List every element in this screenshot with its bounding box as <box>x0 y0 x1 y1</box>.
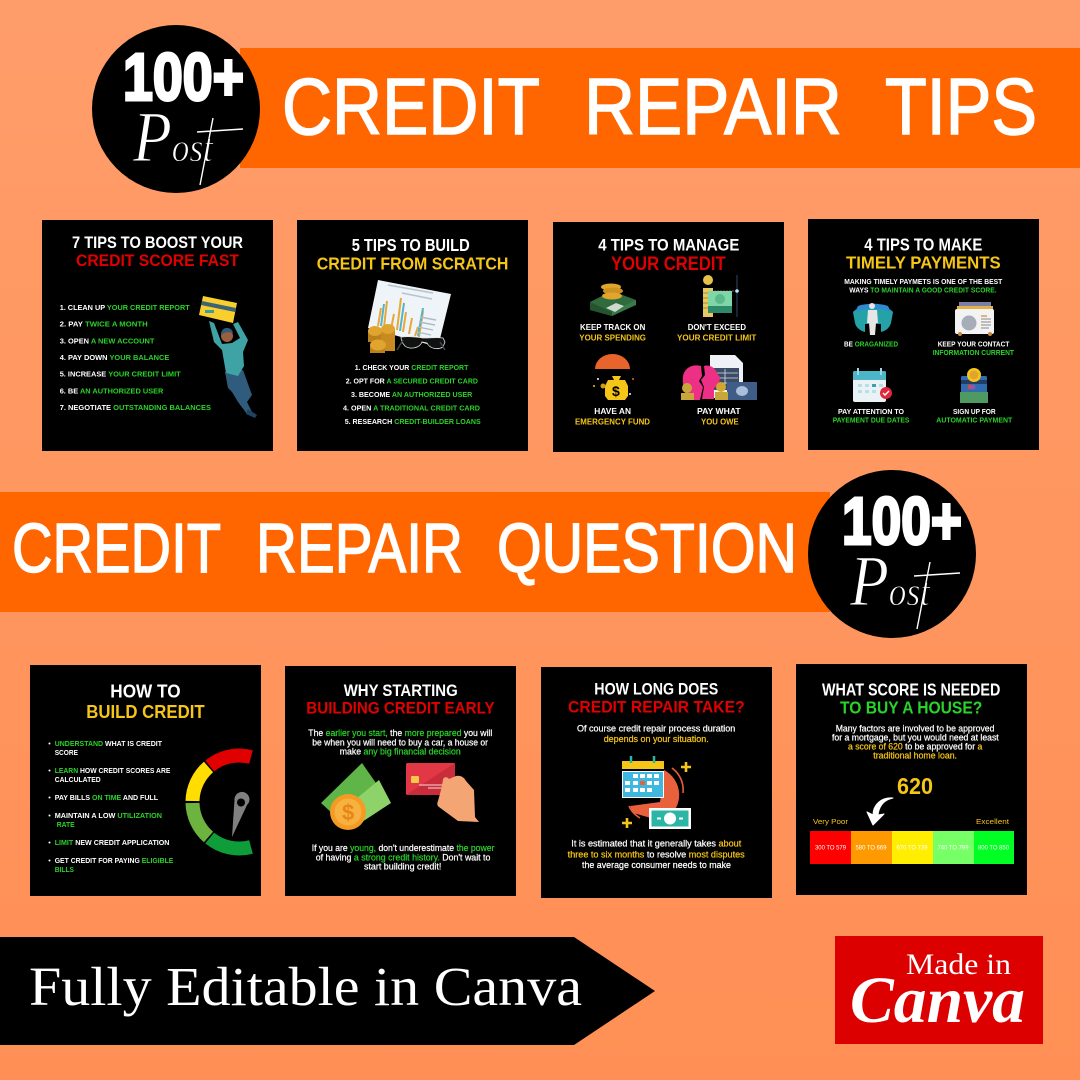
heading: credit repair question: QUESTION <box>497 509 797 587</box>
scale labels: Excellent <box>976 817 1010 826</box>
tips list: 1. CLEAN UP YOUR CREDIT REPORT <box>60 303 190 312</box>
icon: money and coin: $ <box>342 800 354 825</box>
chart: credit score bar: 670 TO 739 <box>896 845 928 852</box>
chart: credit score bar: 580 TO 669 <box>856 845 887 852</box>
tips list: 5. INCREASE YOUR CREDIT LIMIT <box>60 370 181 379</box>
text: keep your contact information current: INFORMATION CURRENT <box>933 350 1015 357</box>
tips list: 4. OPEN A TRADITIONAL CREDIT CARD <box>343 403 481 412</box>
paragraph: earlier you start <box>308 728 492 757</box>
tips list: 5. RESEARCH CREDIT-BUILDER LOANS <box>345 417 481 426</box>
bullet list: UNDERSTAND WHAT IS CREDIT <box>55 739 162 748</box>
text: have an emergency fund <box>575 406 650 426</box>
text: don't exceed your credit limit: DON'T EXCEED <box>688 322 746 332</box>
arrow banner: fully editable in canva: Fully Editable in Canva <box>29 956 582 1017</box>
bullet list: GET CREDIT FOR PAYING ELIGIBLE <box>55 856 173 865</box>
heading: credit repair tips <box>282 62 1037 151</box>
panel heading: CREDIT SCORE FAST <box>76 252 239 270</box>
text: pay attention to payment due dates <box>833 409 910 425</box>
text: keep your contact information current <box>933 342 1015 357</box>
badge: made in canva: Canva <box>850 964 1025 1037</box>
icon: report with coins and glasses <box>368 280 451 353</box>
bullet list: MAINTAIN A LOW UTILIZATION <box>55 811 162 820</box>
icon: umbrella over money bag <box>593 354 634 400</box>
icon: umbrella over money bag: $ <box>612 383 620 399</box>
text: keep track on your spending: KEEP TRACK ON <box>580 322 645 332</box>
paragraph: three to six months: It is estimated that it generally takes about <box>571 839 742 849</box>
text: pay attention to payment due dates: PAYEMENT DUE DATES <box>833 418 910 425</box>
arrow: points to score bar <box>867 798 893 825</box>
scale labels <box>813 817 1010 826</box>
panel heading: WHAT SCORE IS NEEDED <box>822 680 1000 700</box>
icon: organized person <box>853 303 893 335</box>
panel heading: WHY STARTING <box>344 681 458 700</box>
text: sign up for automatic payment <box>936 409 1013 425</box>
panel heading <box>72 234 243 270</box>
text: pay what you owe: PAY WHAT <box>697 406 742 416</box>
paragraph: earlier you start: be when you will need to buy a car, a house or <box>312 737 488 747</box>
badge: 100+ post middle: 100+ <box>842 484 962 559</box>
text: keep track on your spending: YOUR SPENDING <box>579 333 646 343</box>
tips list: 4. PAY DOWN YOUR BALANCE <box>60 353 169 362</box>
tips list: 3. OPEN A NEW ACCOUNT <box>60 336 155 345</box>
badge: 100+ post top: 100+ <box>123 40 244 115</box>
intro text <box>844 279 1003 294</box>
panel heading <box>598 236 739 275</box>
panel: 4 tips to manage your credit <box>553 222 784 452</box>
tips list: 2. OPT FOR A SECURED CREDIT CARD <box>346 376 479 385</box>
chart: credit score bar: 800 TO 850 <box>978 845 1010 852</box>
panel heading: BUILD CREDIT <box>86 701 205 722</box>
panel: 5 tips to build credit from scratch <box>297 220 528 451</box>
banner: credit repair tips <box>240 48 1080 168</box>
tips list: 7. NEGOTIATE OUTSTANDING BALANCES <box>60 403 211 412</box>
panel: 7 tips to boost your credit score fast <box>42 220 273 451</box>
tips list: 3. BECOME AN AUTHORIZED USER <box>351 390 473 399</box>
panel heading: HOW TO <box>110 680 181 701</box>
icon: hand holding credit card <box>406 763 479 822</box>
paragraph: mortgage score <box>832 723 999 761</box>
badge: 100+ post top <box>92 25 260 193</box>
panel heading <box>306 681 495 718</box>
icon: contact information <box>955 302 994 336</box>
panel heading: HOW LONG DOES <box>594 679 718 698</box>
panel: how to build credit <box>30 665 261 896</box>
badge: made in canva <box>835 936 1043 1044</box>
paragraph: if you are young <box>312 843 494 872</box>
bullet list: CALCULATED <box>55 775 101 784</box>
heading: credit repair tips: TIPS <box>885 62 1037 151</box>
intro text: WAYS TO MAINTAIN A GOOD CREDIT SCORE. <box>849 287 997 294</box>
panel heading: CREDIT REPAIR TAKE? <box>568 698 745 717</box>
panel: how long does credit repair take <box>541 667 772 898</box>
chart: credit score bar: 740 TO 799 <box>938 845 969 852</box>
tips list: 6. BE AN AUTHORIZED USER <box>60 386 164 395</box>
badge: 100+ post top: Post <box>132 97 214 177</box>
badge: 100+ post middle <box>808 470 976 638</box>
heading: credit repair tips: CREDIT <box>282 62 540 151</box>
banner: credit repair question <box>0 492 830 612</box>
panel: why starting building credit early <box>285 666 516 896</box>
paragraph: if you are young: start building credit! <box>364 862 441 872</box>
badge: made in canva: Made in <box>906 948 1011 981</box>
text: don't exceed your credit limit <box>677 322 757 343</box>
panel heading: 4 TIPS TO MANAGE <box>598 236 739 255</box>
icon: money and coin <box>321 763 391 830</box>
arrow banner: fully editable in canva <box>0 937 655 1045</box>
paragraph: if you are young: of having a strong credit history. Don't wait to <box>316 852 490 862</box>
text: keep track on your spending <box>579 322 646 343</box>
panel heading: BUILDING CREDIT EARLY <box>306 699 495 718</box>
score value 620: 620 <box>897 773 933 799</box>
bullet list: LIMIT NEW CREDIT APPLICATION <box>55 838 169 847</box>
text: pay what you owe: YOU OWE <box>701 416 739 426</box>
icon: automatic payment <box>960 368 988 403</box>
icon: person holding credit card <box>199 296 257 418</box>
paragraph: process duration: Of course credit repair process duration <box>577 723 735 733</box>
panel heading: TIMELY PAYMENTS <box>846 252 1001 272</box>
icon: broken piggy bank with bills <box>681 355 757 400</box>
bullet list: RATE <box>57 820 75 829</box>
panel heading <box>846 234 1001 272</box>
badge: 100+ post middle: Post <box>849 541 931 621</box>
panel heading <box>86 680 205 722</box>
heading: credit repair question: REPAIR <box>256 509 463 587</box>
text: be organized: BE ORAGANIZED <box>844 342 898 349</box>
text: sign up for automatic payment: AUTOMATIC PAYMENT <box>936 418 1013 425</box>
icon: credit limit <box>703 275 739 317</box>
tips list: 1. CHECK YOUR CREDIT REPORT <box>355 363 469 372</box>
scale labels: Very Poor <box>813 817 849 826</box>
panel heading: 7 TIPS TO BOOST YOUR <box>72 234 243 252</box>
tips list <box>60 303 211 412</box>
panel heading: 5 TIPS TO BUILD <box>352 235 470 255</box>
text: sign up for automatic payment: SIGN UP FOR <box>953 409 996 416</box>
paragraph: process duration: depends on your situation. <box>604 734 709 744</box>
icon: calendar and money <box>622 756 691 829</box>
tips list: 2. PAY TWICE A MONTH <box>60 320 148 329</box>
icon: money stack with coins <box>590 284 636 316</box>
text: pay what you owe <box>697 406 742 426</box>
paragraph: process duration <box>577 723 735 744</box>
text: don't exceed your credit limit: YOUR CREDIT LIMIT <box>677 333 757 343</box>
paragraph: earlier you start: The earlier you start, the more prepared you will <box>308 728 492 738</box>
icon: calendar with check <box>853 368 892 402</box>
heading: credit repair question: CREDIT <box>12 509 221 587</box>
paragraph: three to six months <box>568 839 745 870</box>
paragraph: three to six months: the average consumer needs to make <box>582 860 731 870</box>
panel: what score is needed to buy a house <box>796 664 1027 895</box>
panel heading: 4 TIPS TO MAKE <box>864 234 982 254</box>
intro text: MAKING TIMELY PAYMETS IS ONE OF THE BEST <box>844 279 1003 286</box>
paragraph: mortgage score: Many factors are involved to be approved <box>836 723 994 733</box>
bullet list: SCORE <box>55 748 78 757</box>
panel heading: CREDIT FROM SCRATCH <box>317 253 508 273</box>
bullet list <box>48 739 173 874</box>
chart: credit score bar: 300 TO 579 <box>815 845 847 852</box>
chart: credit score bar <box>810 831 1014 864</box>
bullet list: LEARN HOW CREDIT SCORES ARE <box>55 766 170 775</box>
text: pay attention to payment due dates: PAY ATTENTION TO <box>838 409 905 416</box>
bullet list: BILLS <box>55 865 74 874</box>
text: have an emergency fund: HAVE AN <box>594 406 631 416</box>
paragraph: if you are young: If you are young, don't underestimate the power <box>312 843 494 853</box>
bullet list: PAY BILLS ON TIME AND FULL <box>55 793 158 802</box>
paragraph: mortgage score: traditional home loan. <box>873 751 957 761</box>
panel: 4 tips to make timely payments <box>808 219 1039 450</box>
heading: credit repair tips: REPAIR <box>584 62 842 151</box>
heading: credit repair question <box>12 509 797 587</box>
panel heading: TO BUY A HOUSE? <box>840 698 982 718</box>
panel heading <box>568 679 745 717</box>
paragraph: three to six months: three to six months to resolve most disputes <box>568 849 745 859</box>
chart: credit gauge <box>192 755 251 849</box>
paragraph: mortgage score: for a mortgage, but you would need at least <box>832 733 999 743</box>
tips list <box>343 363 481 426</box>
panel heading <box>317 235 508 273</box>
paragraph: mortgage score: a score of 620 to be approved for a <box>848 742 982 752</box>
panel heading: YOUR CREDIT <box>611 254 726 275</box>
paragraph: earlier you start: make any big financial decision <box>340 747 461 757</box>
panel heading <box>822 680 1000 718</box>
text: have an emergency fund: EMERGENCY FUND <box>575 416 650 426</box>
text: keep your contact information current: KEEP YOUR CONTACT <box>938 342 1010 349</box>
